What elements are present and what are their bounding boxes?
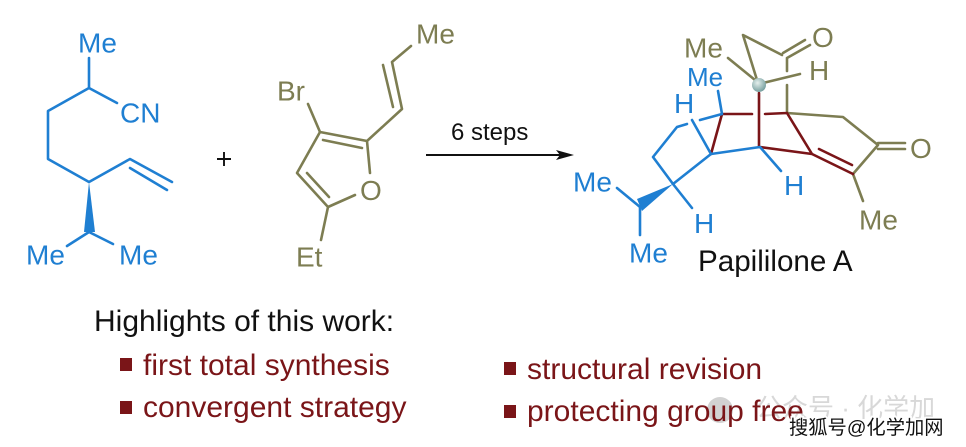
molecule: bromofuran fragment (olive): Me — [416, 18, 455, 50]
molecule: nitrile fragment (blue): Me — [119, 240, 158, 270]
blue bonds and labels — [573, 62, 804, 268]
blue bonds and labels: H — [694, 208, 714, 239]
highlight: structural revision: structural revision — [527, 353, 762, 386]
compound name: Papililone A — [698, 245, 853, 278]
blue bonds and labels: Me — [629, 238, 668, 268]
maroon bonds — [711, 93, 853, 174]
olive bonds and labels: Me — [859, 204, 898, 236]
molecule: nitrile fragment (blue) — [26, 28, 172, 270]
olive bonds and labels: Me — [684, 32, 723, 64]
reaction arrow with label — [426, 119, 574, 160]
molecule: bromofuran fragment (olive): Br — [277, 76, 305, 106]
olive bonds and labels: O — [812, 22, 834, 53]
molecule: nitrile fragment (blue): Me — [78, 28, 117, 58]
molecule: nitrile fragment (blue): CN — [120, 98, 160, 128]
blue bonds and labels: Me — [687, 62, 723, 92]
plus sign — [217, 152, 231, 166]
watermark: WeChat account: 公众号 · 化学加 — [756, 393, 935, 423]
olive bonds and labels: H — [809, 55, 829, 86]
blue bonds and labels: H — [784, 170, 804, 201]
molecule: bromofuran fragment (olive): Et — [296, 242, 323, 272]
molecule: nitrile fragment (blue): Me — [26, 240, 65, 270]
blue bonds and labels: Me — [573, 166, 612, 198]
central atom ball — [752, 78, 766, 92]
reaction arrow with label: 6 steps — [451, 119, 528, 146]
olive bonds and labels: O — [910, 133, 932, 164]
highlights heading: Highlights of this work: — [94, 305, 394, 338]
highlight: convergent strategy: convergent strategy — [143, 391, 406, 424]
olive bonds and labels — [684, 22, 932, 236]
molecule: Papililone A product — [573, 22, 932, 268]
highlight: first total synthesis: first total synthesis — [143, 349, 390, 382]
watermark: Sohu: 搜狐号@化学加网 — [789, 417, 944, 439]
blue bonds and labels: H — [674, 88, 694, 119]
highlight: protecting group free: protecting group free — [527, 395, 804, 428]
molecule: bromofuran fragment (olive) — [277, 18, 455, 272]
molecule: bromofuran fragment (olive): O — [360, 175, 382, 206]
